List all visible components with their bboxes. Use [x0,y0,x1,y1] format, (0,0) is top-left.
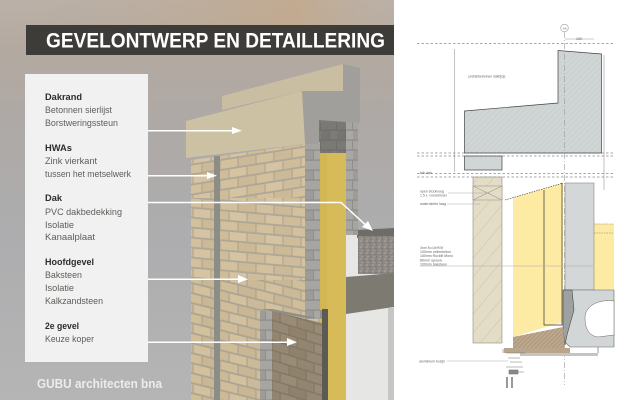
legend: 2e gevel [45,321,94,345]
legend: Dak: Kanaalplaat [45,232,95,243]
brick rear face [319,122,358,235]
title bar: GEVELONTWERP EN DETAILLERING [46,30,385,52]
legend: Dakrand: Betonnen sierlijst [45,105,112,116]
arrow: Hoofdgevel [148,275,248,283]
background wall right [346,235,394,400]
insulation yellow [320,153,346,400]
drawing annotations: open stootvoeg [420,190,444,194]
grey prefab coping section [464,50,602,170]
legend: Dak: Dak [45,193,63,204]
grey concrete wall [565,183,594,290]
drawing annotations: AA [563,26,567,30]
legend: Dak [45,193,122,243]
legend: Hoofdgevel: Isolatie [45,283,74,294]
drawing annotations: waterdichte laag [420,202,446,206]
yellow insulation [505,183,614,337]
drawing annotations: b/b-dak [420,171,432,175]
kanaalplaat concrete [346,273,394,314]
arrow: Dak [148,202,373,231]
legend: HWAs [45,143,131,180]
hollow core plank [563,290,614,347]
title bar [26,25,394,55]
drawing annotations [419,26,582,364]
dakrand: concrete coping [186,64,360,158]
legend: HWAs: tussen het metselwerk [45,169,131,180]
legend: Dakrand: Dakrand [45,92,82,103]
legend: Dak: PVC dakbedekking [45,207,122,218]
drawing annotations: Gevel: Rc=4,5m²K/W [420,246,443,250]
drawing annotations: 80mm spouw [420,258,442,262]
legend: Hoofdgevel: Hoofdgevel [45,257,94,268]
dimension lines [454,24,604,385]
legend: 2e gevel: 2e gevel [45,321,79,332]
legend: Dakrand: Borstweringssteun [45,118,118,129]
drawing annotations: 100mm zellenbeton [420,250,451,254]
brown wedge [504,327,598,356]
brick main facade [191,142,320,400]
arrow: 2e gevel [148,338,297,346]
2e gevel: recessed dark brick [259,309,328,400]
legend: Dak: Isolatie [45,220,74,231]
panel: legend [25,74,148,362]
drawing annotations: aluminium kozijn [419,360,445,364]
arrow: HWAs [148,172,217,179]
legend: 2e gevel: Keuze koper [45,334,94,345]
arrow: Dakrand [148,127,242,134]
tan cladding [473,177,502,343]
logo text: GUBU architecten bna [37,376,163,391]
legend: HWAs: Zink vierkant [45,156,97,167]
drawing annotations: 1.5 x. voorzetvoer [420,194,448,198]
legend: Dakrand [45,92,118,129]
drawing annotations: 160mm Rockfit Mono [420,254,453,258]
dak: roof slab [357,228,394,274]
legend: Hoofdgevel [45,257,103,307]
window frame [503,349,525,388]
legend: HWAs: HWAs [45,143,72,154]
legend: Hoofdgevel: Baksteen [45,270,82,281]
panel: technical section drawing [394,0,640,400]
panel: facade photo [0,0,394,400]
drawing annotations: 100 [576,37,582,41]
drawing annotations: 100mm baksteen [420,262,447,266]
drawing annotations: prefabbetonnen dakbjsje [468,74,506,78]
legend: Hoofdgevel: Kalkzandsteen [45,296,103,307]
leader lines [420,193,593,361]
